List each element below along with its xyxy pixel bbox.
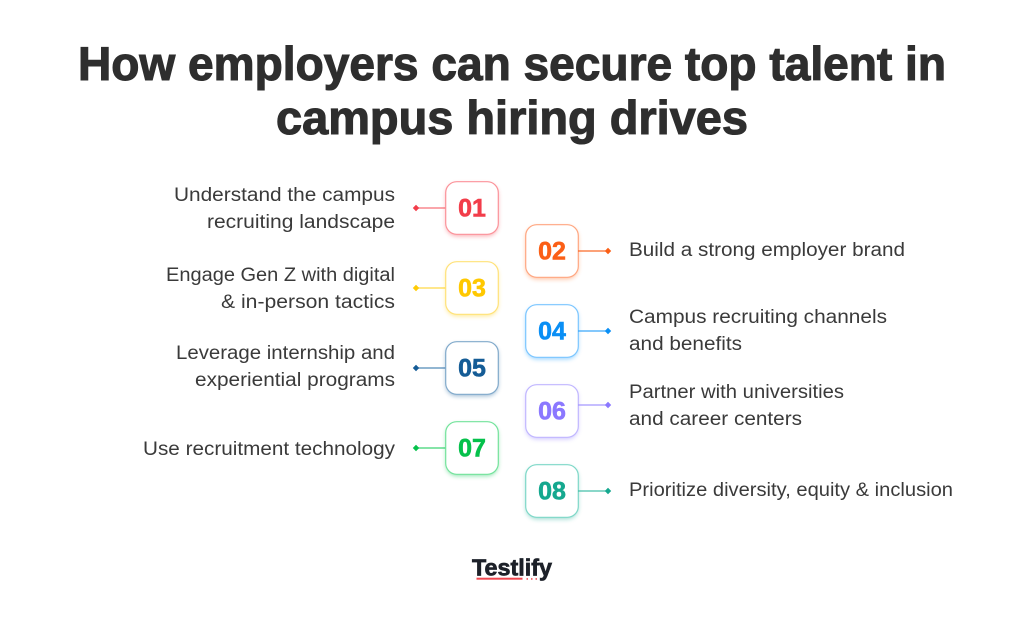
number box 02 — [526, 225, 578, 279]
connector 04 — [578, 328, 611, 334]
text: item 05: experiential programs — [195, 370, 395, 391]
text: item 01: recruiting landscape — [207, 212, 395, 233]
connector 07 — [413, 445, 446, 451]
text: item 04: Campus recruiting channels — [629, 307, 887, 328]
item 07: use recruitment technology — [143, 422, 498, 476]
number box 01: 01 — [458, 194, 486, 222]
text: item 07: Use recruitment technology — [143, 439, 396, 460]
number box 07 — [446, 422, 498, 476]
text: item 01: Understand the campus — [174, 185, 395, 206]
number box 08: 08 — [538, 477, 566, 505]
text: item 03: & in-person tactics — [221, 292, 395, 313]
connector 08 — [578, 488, 611, 494]
logo: Testlify: Testlify — [472, 554, 552, 580]
connector 01 — [413, 205, 446, 211]
number box 03 — [446, 262, 498, 316]
title — [78, 37, 946, 144]
item 06: partner with universities — [526, 382, 844, 439]
number box 05: 05 — [458, 354, 486, 382]
connector 05 — [413, 365, 446, 371]
item 01: understand the campus recruiting landscape — [174, 182, 498, 236]
text: item 03 — [166, 265, 395, 313]
connector 06 — [578, 402, 611, 408]
text: item 03: Engage Gen Z with digital — [166, 265, 395, 286]
number box 01 — [446, 182, 498, 236]
item 04: campus recruiting channels — [526, 305, 887, 359]
number box 04: 04 — [538, 317, 566, 345]
connector 03 — [413, 285, 446, 291]
text: item 01 — [174, 185, 395, 233]
text: item 08: Prioritize diversity, equity & inclusion — [629, 480, 953, 501]
number box 08 — [526, 465, 578, 519]
text: item 05 — [176, 343, 395, 391]
text: item 04 — [629, 307, 887, 355]
item 03: engage Gen Z — [166, 262, 498, 316]
item 05: leverage internship — [176, 342, 498, 396]
number box 03: 03 — [458, 274, 486, 302]
number box 06: 06 — [538, 397, 566, 425]
text: item 06: and career centers — [629, 409, 802, 430]
text: item 06: Partner with universities — [629, 382, 844, 403]
number box 05 — [446, 342, 498, 396]
title: campus hiring drives — [276, 91, 748, 144]
item 02: build a strong employer brand — [526, 225, 905, 279]
number box 07: 07 — [458, 434, 486, 462]
title: How employers can secure top talent in — [78, 37, 946, 90]
number box 02: 02 — [538, 237, 566, 265]
text: item 06 — [629, 382, 844, 430]
text: item 05: Leverage internship and — [176, 343, 395, 364]
item 08: prioritize diversity — [526, 465, 953, 519]
connector 02 — [578, 248, 611, 254]
text: item 04: and benefits — [629, 334, 742, 355]
number box 06 — [526, 385, 578, 439]
text: item 02: Build a strong employer brand — [629, 240, 905, 261]
number box 04 — [526, 305, 578, 359]
